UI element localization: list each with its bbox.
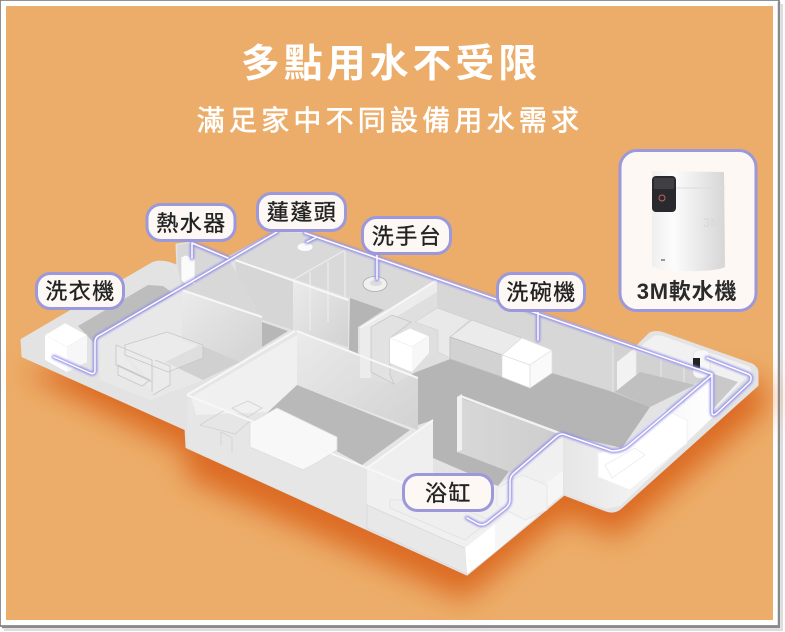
long counter [450,320,522,355]
bedroom 2 left wall [191,335,297,415]
main hall floor [349,298,650,486]
lower wall top edge [460,396,562,434]
balcony floor [615,372,695,407]
base slab [22,232,757,574]
shower room partition [293,280,348,347]
bed [250,408,337,470]
kitchen interior [360,280,470,384]
label: bathtub [404,474,492,510]
kitchen left wall [360,280,437,378]
bed frame lines [200,401,262,452]
icon: water heater [181,255,195,285]
label: dishwasher: 洗碗機 [506,280,577,305]
bedroom 2 block [187,330,465,574]
shower room floor sliver [262,322,288,347]
icon: kitchen cube [390,328,429,372]
heater wall [177,243,262,318]
label: shower head [258,194,346,230]
icon: shower head [297,242,313,252]
bedroom 2 near partition [367,420,433,492]
counter translucent cabinet [371,315,411,384]
bedroom 2 floor [267,385,410,465]
title: 多點用水不受限 [241,43,541,86]
back wall [228,232,437,328]
bathtub [390,500,490,540]
right wing terrace [640,335,752,412]
label: shower head: 蓮蓬頭 [267,200,337,225]
corner counter [415,308,470,358]
bedroom 1 area [96,290,262,400]
glass screen [293,250,345,330]
label: water heater [147,204,235,240]
isometric floor plan [22,232,757,574]
small softener unit [693,350,710,378]
laundry strip floor [78,285,180,342]
label: bathtub: 浴缸 [425,481,472,506]
label: wash basin [362,218,450,254]
icon: sink [363,276,387,292]
icon: washing machine cube [45,323,87,372]
label: dishwasher [498,274,584,310]
balcony glass room [613,345,712,407]
kitchen back wall [437,280,637,392]
wall highlights [96,232,712,485]
sofa outline [116,332,203,395]
bathroom white corner [465,524,495,574]
right bathroom floor strip block [563,375,713,509]
bathtub front [367,505,467,574]
bathroom block [367,435,563,574]
label: washing machine: 洗衣機 [45,279,116,304]
water pipes [54,232,751,525]
floor plan shadow [22,330,766,600]
icon: dishwasher cube [502,338,552,388]
label: washing machine [36,274,124,308]
bedroom 1 floor [165,345,240,380]
label: water heater: 熱水器 [156,211,227,236]
icon: softener product: 3M [703,215,721,230]
right wing inner floor [714,374,738,408]
hall lower wall [457,397,561,473]
label: wash basin: 洗手台 [372,224,442,249]
right white cabinet [598,410,687,490]
icon: softener product [652,171,725,271]
subtitle: 滿足家中不同設備用水需求 [197,105,583,136]
bedroom 2 back wall [297,330,418,430]
shower room wall left [235,260,293,330]
bedroom 1 partition [182,290,262,362]
panel: 3M water softener: 3M軟水機 [637,279,737,304]
panel: 3M water softener [620,150,756,310]
sink outline [605,448,645,478]
washbasin cabinet [497,475,547,520]
